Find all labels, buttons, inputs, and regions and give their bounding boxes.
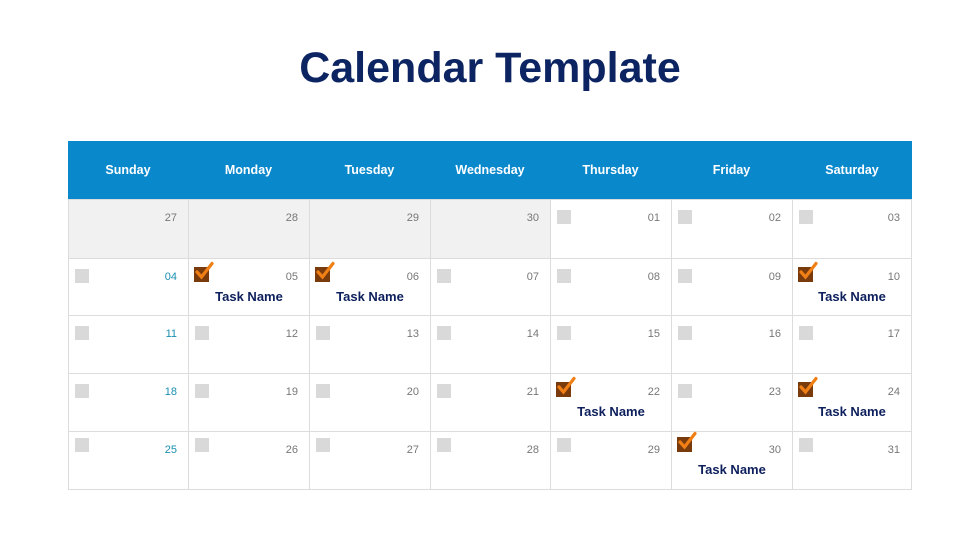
- header row: Saturday: [825, 163, 879, 177]
- row 2: [68, 258, 189, 316]
- calendar grid: 12: [286, 328, 298, 340]
- header row: [68, 141, 912, 199]
- calendar grid: 30: [527, 212, 539, 224]
- calendar grid: 05: [286, 271, 298, 283]
- calendar grid: 29: [407, 212, 419, 224]
- header row: Monday: [225, 163, 272, 177]
- calendar grid: 19: [286, 386, 298, 398]
- header row: Wednesday: [455, 163, 525, 177]
- calendar grid: 17: [888, 328, 900, 340]
- calendar grid: 13: [407, 328, 419, 340]
- calendar grid: 15: [648, 328, 660, 340]
- calendar grid: 30: [769, 444, 781, 456]
- row 5: 25: [165, 444, 177, 456]
- calendar grid: Task Name: [215, 289, 283, 304]
- header row: Thursday: [582, 163, 639, 177]
- row 3: 11: [166, 328, 177, 340]
- calendar grid: 09: [769, 271, 781, 283]
- title: Calendar Template: [299, 44, 681, 92]
- row 4: 18: [165, 386, 177, 398]
- calendar grid: 07: [527, 271, 539, 283]
- calendar grid: Task Name: [818, 404, 886, 419]
- calendar grid: Task Name: [698, 462, 766, 477]
- header row: Friday: [713, 163, 750, 177]
- calendar grid: 31: [888, 444, 900, 456]
- header row: Sunday: [105, 163, 151, 177]
- calendar grid: 21: [527, 386, 539, 398]
- calendar grid: 20: [407, 386, 419, 398]
- calendar grid: 24: [888, 386, 900, 398]
- calendar grid: 06: [407, 271, 419, 283]
- row 1: [68, 199, 189, 259]
- calendar grid: 22: [648, 386, 660, 398]
- calendar grid: 08: [648, 271, 660, 283]
- calendar grid: 23: [769, 386, 781, 398]
- calendar grid: 01: [648, 212, 660, 224]
- calendar grid: 26: [286, 444, 298, 456]
- row 2: 04: [165, 271, 177, 283]
- calendar grid: 29: [648, 444, 660, 456]
- row 4: [68, 373, 189, 432]
- calendar grid: 03: [888, 212, 900, 224]
- calendar grid: Task Name: [336, 289, 404, 304]
- calendar grid: Task Name: [577, 404, 645, 419]
- row 3: [68, 315, 189, 374]
- row 5: [68, 431, 189, 490]
- calendar grid: 27: [407, 444, 419, 456]
- header row: Tuesday: [345, 163, 394, 177]
- calendar grid: Task Name: [818, 289, 886, 304]
- calendar grid: 28: [527, 444, 539, 456]
- calendar grid: 28: [286, 212, 298, 224]
- calendar grid: 10: [888, 271, 900, 283]
- calendar grid: 02: [769, 212, 781, 224]
- calendar grid: 14: [527, 328, 539, 340]
- calendar grid: 16: [769, 328, 781, 340]
- row 1: 27: [165, 212, 177, 224]
